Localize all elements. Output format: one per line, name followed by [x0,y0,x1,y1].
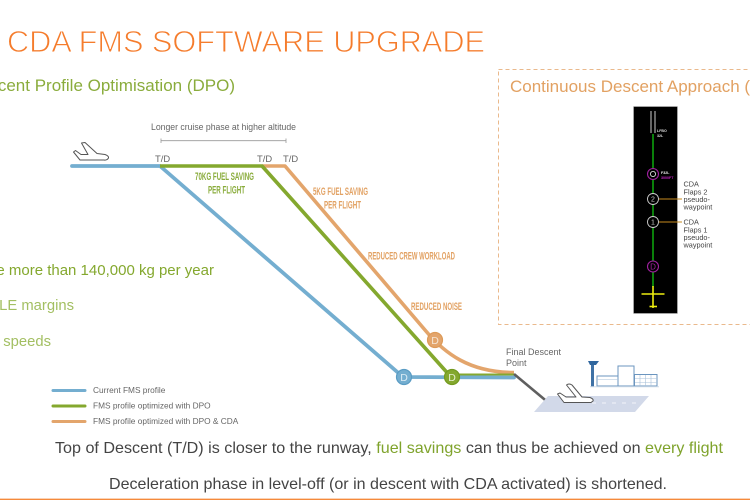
annotation: longer cruise phase: Longer cruise phase at higher altitude [151,121,296,132]
legend: DPO: FMS profile optimized with DPO [93,400,211,410]
control tower [591,362,594,387]
top of descent labels: T/D [283,153,298,164]
runway [534,396,649,412]
legend: current [53,385,166,395]
marker: blue D: D [400,372,408,384]
navigation display: F32L [661,171,670,175]
marker: orange D [428,332,442,348]
top of descent labels: T/D [257,153,272,164]
label: final descent point: Point [506,358,527,368]
navigation display: 3000FT [661,176,674,180]
marker: green D [444,370,460,384]
icon: cruising aircraft [74,142,109,160]
final approach segment [514,374,550,404]
callout: flaps 2: Flaps 2 [684,187,707,196]
marker: green D: D [448,372,456,384]
callout: flaps 1: pseudo- [684,233,710,242]
green level segment [451,374,514,376]
green profile [160,166,451,377]
label: 70kg fuel saving: 70KG FUEL SAVING [195,171,254,183]
terminal buildings [597,366,657,386]
callout: flaps 1 [659,218,712,250]
label: final descent point: Final Descent [506,347,562,357]
illustration: airport [534,361,659,412]
label: reduced crew workload: REDUCED CREW WORKLOAD [368,250,455,262]
callout: flaps 1: waypoint [682,241,712,250]
legend: DPO and CDA: FMS profile optimized with DPO & CDA [93,416,239,426]
label: 5kg fuel saving: PER FLIGHT [324,200,361,212]
label: 70kg fuel saving: PER FLIGHT [208,184,245,196]
legend [53,385,239,426]
profile chart lines [72,166,514,378]
callout: flaps 1: Flaps 1 [684,225,707,234]
panel border [498,70,750,324]
navigation display: 32L [657,134,664,138]
navigation display: 2 [651,196,655,204]
label: 5kg fuel saving [313,186,368,212]
callout: flaps 2: CDA [684,180,699,188]
landing aircraft [558,384,593,402]
callout: flaps 2 [659,180,712,212]
label: 70kg fuel saving [195,171,254,196]
orange profile [262,166,514,372]
navigation display: 1 [651,220,655,226]
callout: flaps 1: CDA [684,218,699,226]
marker: orange D: D [431,335,439,347]
top of descent labels [155,153,298,164]
blue profile [72,166,514,378]
navigation display: LFBO [657,129,667,133]
label: reduced noise: REDUCED NOISE [411,301,462,313]
legend: current: Current FMS profile [93,385,166,395]
navigation display [634,106,678,314]
callout: flaps 2: waypoint [682,203,712,212]
navigation display: D [650,262,656,272]
callout: flaps 2: pseudo- [684,195,710,204]
panel: continuous descent approach [498,70,750,324]
label: 5kg fuel saving: 5KG FUEL SAVING [313,186,368,198]
top of descent labels: T/D [155,153,170,164]
benefit text: speeds: speeds [3,334,51,350]
footer sentence: top of descent: Top of Descent (T/D) is closer to the runway, fuel savings can thus be achieved on every flight [55,440,724,457]
title: CDA FMS SOFTWARE UPGRADE [7,24,485,59]
marker: blue D [396,370,412,384]
footer sentence: deceleration: Deceleration phase in level-off (or in descent with CDA activated) is shortened. [109,476,667,493]
